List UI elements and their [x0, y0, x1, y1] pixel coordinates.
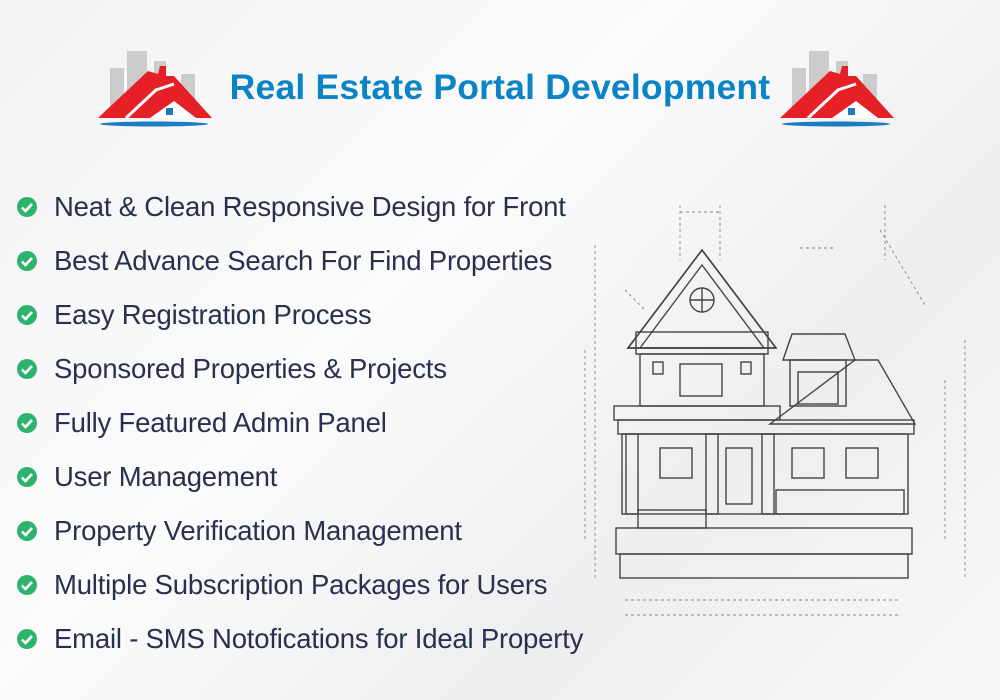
body — [622, 434, 908, 514]
item 8: Multiple Subscription Packages for Users — [54, 569, 547, 600]
item 4: Sponsored Properties & Projects — [54, 353, 447, 384]
item 3: Easy Registration Process — [54, 299, 372, 330]
item 9: Email - SMS Notofications for Ideal Property — [54, 623, 583, 654]
item 6: User Management — [54, 461, 277, 492]
house blueprint illustration — [584, 205, 966, 616]
item 5: Fully Featured Admin Panel — [54, 407, 387, 438]
feature list — [17, 191, 584, 654]
item 1: Neat & Clean Responsive Design for Front — [54, 191, 566, 222]
porch roof — [614, 406, 780, 420]
item 7: Property Verification Management — [54, 515, 462, 546]
logo: right house — [780, 51, 894, 126]
main gable — [628, 250, 776, 348]
item 2: Best Advance Search For Find Properties — [54, 245, 552, 276]
right wing — [783, 334, 855, 360]
title: Real Estate Portal Development — [230, 67, 770, 107]
logo: left house — [98, 51, 212, 126]
